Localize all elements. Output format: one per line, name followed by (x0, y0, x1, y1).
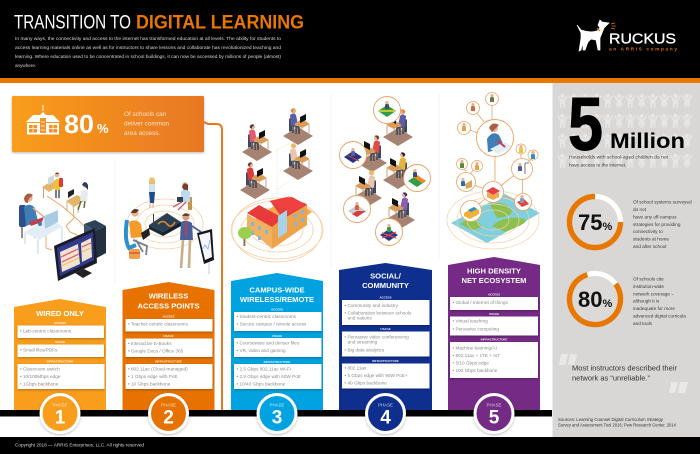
panel: phase 5 high density (448, 257, 540, 410)
desk student (352, 170, 382, 207)
standing woman (149, 177, 155, 208)
stat: 5 Million (568, 82, 685, 166)
node: school (482, 182, 504, 202)
access block: • Global / Internet of things (452, 300, 508, 305)
badge: phase 3 (256, 393, 298, 434)
node: bus (460, 200, 482, 222)
teacher at desk (19, 194, 63, 254)
world map (451, 194, 540, 243)
illustration: phase 2 wireless (126, 177, 214, 274)
panel: column dividers (115, 94, 439, 285)
access block: and nations (348, 316, 372, 320)
text: 80% description: although it is (633, 298, 660, 304)
heading: ACCESS POINTS (137, 302, 200, 310)
node (458, 122, 470, 134)
heading (240, 286, 314, 304)
infrastructure block: INFRASTRUCTURE (481, 338, 507, 342)
text: 80% description: network coverage – (633, 292, 674, 296)
badge: phase 5: PHASE (487, 402, 502, 408)
heading (137, 292, 200, 310)
intro text: learning. Where education used to be concentrated in school buildings, it can now be accessed by millions of people (almost) (15, 54, 281, 59)
heading (362, 272, 409, 290)
infrastructure block: INFRASTRUCTURE (47, 360, 73, 364)
stat: 80%: 80 (64, 109, 94, 139)
access block (234, 308, 322, 331)
access block: • Collaboration between schools (344, 310, 412, 316)
usage block: • VR, video and gaming (236, 348, 286, 353)
badge: phase 2 (148, 393, 189, 434)
usage block: USAGE (55, 340, 65, 344)
node (528, 150, 538, 160)
node (486, 92, 498, 106)
infrastructure block: • 1 Gbps edge with PoE (128, 374, 178, 379)
badge: phase 2: PHASE (161, 402, 176, 408)
panel: phase 3 campus-wide (231, 273, 323, 410)
badge: phase 4: 4 (380, 408, 391, 428)
quote: network as “unreliable.” (572, 374, 650, 382)
intro text: access learning materials online as well as for instructors to share lessons and collaborate has revolutionized teaching and (15, 45, 281, 50)
sources: Sources: Learning Counsel Digital Curriculum Strategy (558, 417, 664, 422)
stat text: households: Households with school-aged children do not (569, 154, 669, 160)
illustration: phase 3 campus (231, 108, 323, 262)
intro text: anywhere. (15, 63, 36, 68)
usage block (450, 312, 538, 336)
intro text (15, 36, 281, 68)
infrastructure block: INFRASTRUCTURE (155, 360, 182, 364)
access block: ACCESS (379, 296, 392, 300)
desk student (240, 162, 270, 199)
infrastructure block: • 802.11ax (344, 366, 367, 370)
illustration: phase 5 ecosystem (447, 92, 540, 249)
student with headphones (66, 182, 88, 213)
globe badge: Africa (404, 164, 430, 192)
text: 75% description: strategies for providing (633, 222, 681, 227)
donut: 75% (570, 196, 620, 248)
donut: 75%: 75% (578, 210, 612, 235)
desk student (242, 124, 272, 161)
callout: 80% common area: % (97, 121, 109, 136)
icon: dog (577, 20, 609, 51)
usage block (342, 327, 430, 356)
infrastructure block (450, 338, 538, 378)
infrastructure block: • 802.11ax + LTE + IoT (452, 353, 500, 358)
badge: phase 4: PHASE (378, 402, 393, 408)
title: DIGITAL LEARNING (136, 12, 304, 34)
access block: ACCESS (54, 321, 66, 325)
access block (342, 296, 430, 325)
header band (0, 0, 700, 78)
panel: phase 2 wireless access points (122, 282, 214, 410)
badge: phase 3: PHASE (270, 402, 285, 408)
text: 80% description: advanced digital curricula (633, 314, 686, 318)
panel: phase 1 wired only (14, 299, 106, 410)
boy with laptop (126, 209, 150, 259)
access block (126, 314, 212, 332)
callout text: area access. (124, 130, 160, 137)
callout text: deliver common (124, 120, 170, 128)
infrastructure block (342, 359, 430, 388)
badge: phase 1: PHASE (53, 402, 68, 408)
stat text: households (569, 154, 669, 168)
school building (247, 196, 312, 249)
illustration: phase 1 wired (19, 172, 106, 281)
hub: teacher (476, 120, 514, 156)
text: 75% description: Of school systems surveyed (633, 200, 692, 204)
badge: phase 1: 1 (55, 408, 66, 428)
node (472, 160, 482, 172)
sources (558, 417, 677, 428)
icon: school (26, 105, 60, 134)
text: 75% description: have any off-campus (633, 214, 677, 220)
infrastructure block: • Machine learning/AI (452, 346, 497, 350)
usage block (126, 334, 212, 357)
stat: 5 Million: Million (610, 130, 685, 153)
stat text: households: have access to the internet. (569, 162, 626, 168)
usage block: • Pervasive video conferencing (344, 334, 409, 340)
badge: phase 2: 2 (163, 408, 174, 428)
text: 75% description (633, 200, 692, 249)
heading (462, 266, 526, 285)
usage block: • Virtual teaching (452, 318, 488, 324)
heading: COMMUNITY (362, 281, 409, 290)
infrastructure block: • 5 Gbps edge with 90W PoE+ (344, 373, 408, 378)
usage block: • Small files/PDFs (20, 348, 58, 352)
donut: 80% (559, 263, 631, 335)
badge: phase 5: 5 (489, 408, 500, 428)
badge: phase 3: 3 (272, 408, 282, 428)
intro text: In many ways, the connectivity and access to the internet has transformed education at all levels. The ability for students to (15, 36, 281, 41)
network links (462, 106, 533, 211)
usage block: • Interactive E-Books (128, 341, 172, 346)
badge: phase 5 (474, 393, 514, 434)
heading: SOCIAL/ (370, 272, 402, 280)
infrastructure block: • 1Gbps backbone (20, 382, 59, 386)
node (516, 144, 526, 154)
globe badge: UK (376, 218, 402, 246)
usage block: • Courseware and denser files (236, 340, 300, 346)
usage block (234, 334, 322, 357)
usage block: USAGE (380, 327, 391, 331)
infrastructure block (126, 360, 212, 389)
sources: Survey and Assessment Tool 2016; Pew Research Center, 2014 (558, 422, 677, 428)
infrastructure block: • 10 Gbps backbone (128, 382, 171, 386)
infrastructure block: • 2.5 Gbps edge with 60W PoE (236, 374, 301, 379)
heading: CAMPUS-WIDE (249, 286, 305, 294)
node: factory (514, 194, 532, 210)
node (456, 172, 476, 192)
icon: children pattern (557, 93, 693, 171)
globe badge: Jamaica (374, 96, 400, 124)
heading: WIRELESS/REMOTE (240, 295, 314, 304)
computer tower (84, 220, 106, 259)
usage block: • Pervasive computing (452, 326, 499, 332)
illustration: phase 4 social (340, 96, 430, 246)
infrastructure block (234, 360, 322, 389)
footer text: Copyright 2018 — ARRIS Enterprises, LLC. All rights reserved (15, 442, 145, 448)
text: 80% description (633, 276, 686, 326)
access block: • Community and industry (344, 303, 399, 308)
infrastructure block: • Classroom switch (20, 366, 60, 372)
timeline bar (0, 410, 552, 416)
infrastructure block (18, 360, 104, 389)
infrastructure block: • 10/100Mbps edge (20, 374, 61, 379)
footer band (0, 437, 700, 454)
usage block: • Big data analytics (344, 348, 385, 352)
quote (572, 364, 677, 382)
access point (149, 213, 181, 236)
callout text (124, 111, 170, 137)
desk student (383, 109, 413, 146)
callout text: Of schools can (124, 111, 167, 118)
heading: NET ECOSYSTEM (462, 276, 526, 285)
access block: ACCESS (162, 314, 175, 318)
heading: WIRELESS (149, 292, 188, 300)
seated woman (173, 182, 192, 210)
logo: Ruckus (577, 20, 677, 52)
badge: phase 1 (40, 393, 80, 434)
access block: • Teacher-centric classrooms (128, 322, 189, 326)
globe badge: Europe (340, 142, 366, 168)
infrastructure block: • 10/40 Gbps backbone (236, 382, 286, 386)
access block: • Student-centric classrooms (236, 314, 297, 319)
desk student (357, 135, 387, 172)
infrastructure block: • 100 Gbps backbone (452, 368, 498, 373)
desk student (283, 143, 313, 180)
title: TRANSITION TO (14, 12, 131, 34)
usage block (18, 340, 104, 357)
large monitor (54, 228, 97, 281)
text: 80% description: and tools (633, 321, 653, 326)
access block: • Lab-centric classrooms (20, 328, 72, 334)
text: 75% description: and after school (633, 244, 666, 249)
text: 80% description: inadequate for more (633, 306, 675, 311)
quote: Most instructors described their (572, 364, 677, 372)
header orange rule (0, 78, 700, 83)
panel: phase 4 social community (339, 263, 432, 410)
badge: phase 4 (365, 393, 406, 434)
man in suit (180, 213, 201, 268)
access block (18, 321, 104, 338)
access block: ACCESS (271, 308, 283, 312)
access block: • Secure campus / remote access (236, 322, 307, 326)
text: 75% description: students at home (633, 236, 669, 242)
text: 80% description: Of schools cite (633, 276, 664, 282)
quote marks (559, 354, 688, 393)
text: 75% description: do not (633, 207, 647, 212)
desk student (283, 108, 313, 145)
tree (238, 227, 252, 246)
globe badge: Netherlands (344, 196, 370, 222)
wordmark: RUCKUS (609, 32, 676, 48)
stat: 5 Million: 5 (568, 82, 603, 166)
usage block: • Google Docs / Office 365 (128, 348, 184, 354)
touch screen (197, 229, 214, 274)
usage block: USAGE (489, 312, 499, 316)
infrastructure block: INFRASTRUCTURE (372, 359, 399, 363)
infrastructure block: • 40 Gbps backbone (344, 380, 387, 386)
desk student (385, 192, 415, 229)
infrastructure block: • 2.5 Gbps 802.11ac Wi-Fi (236, 366, 291, 372)
node (512, 158, 532, 180)
right stats panel (552, 83, 700, 437)
infrastructure block: • 5/10 Gbps edge (452, 360, 489, 366)
text: 80% description: institution-wide (633, 284, 664, 289)
tagline: an ARRIS company (609, 46, 677, 52)
heading: HIGH DENSITY (467, 266, 521, 276)
access block: ACCESS (488, 292, 500, 296)
donut: 80%: 80% (578, 287, 612, 312)
usage block: and streaming (348, 340, 378, 344)
node (456, 158, 468, 170)
student with backpack (42, 172, 63, 198)
usage block: USAGE (163, 334, 174, 338)
connector line (204, 122, 222, 411)
usage block: USAGE (272, 334, 282, 338)
desk student (383, 152, 413, 189)
infrastructure block: • 802.11ac (Cloud-managed) (128, 366, 188, 372)
heading: WIRED ONLY (36, 309, 84, 318)
infrastructure block: INFRASTRUCTURE (264, 360, 290, 364)
node (466, 102, 480, 114)
text: 75% description: connectivity to (633, 229, 663, 234)
callout: 80% common area (12, 96, 204, 152)
access block (450, 292, 538, 310)
